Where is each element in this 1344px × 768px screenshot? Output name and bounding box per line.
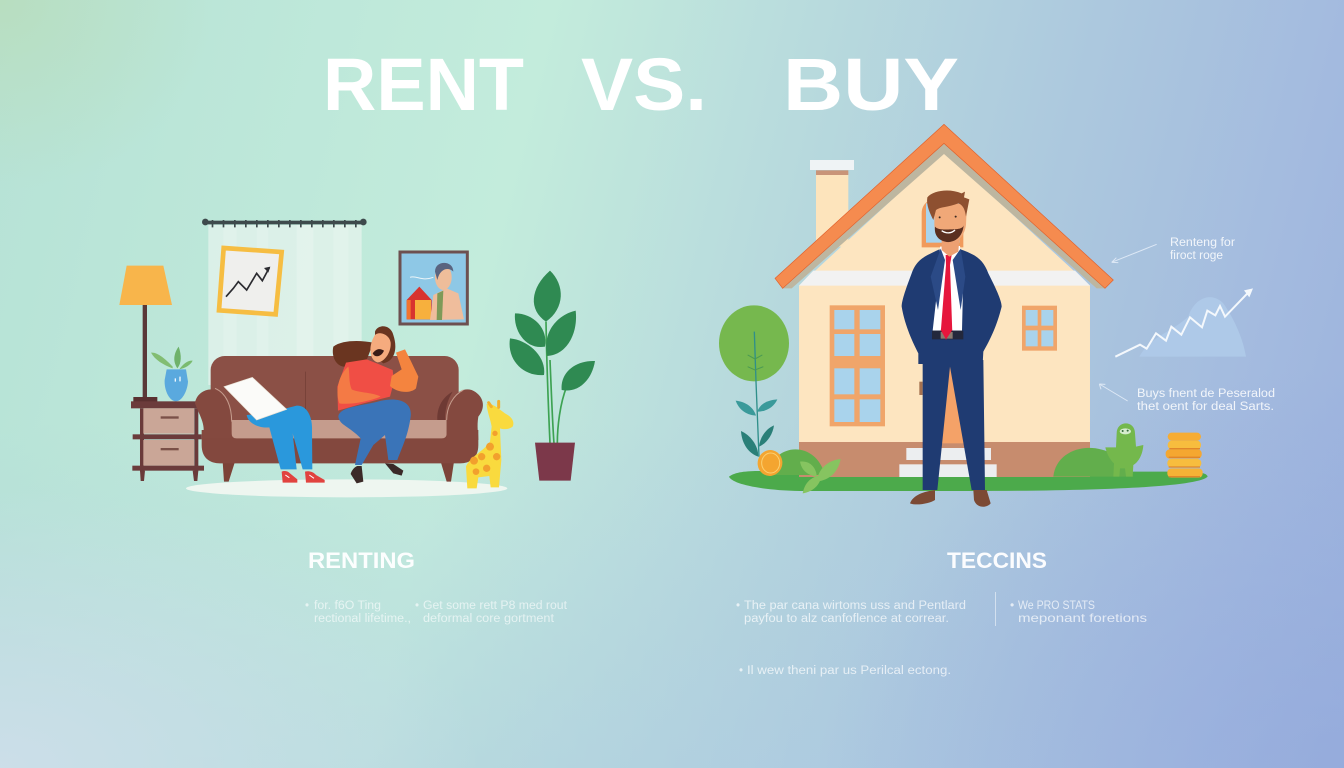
belt bbox=[932, 323, 963, 339]
sofa bbox=[195, 356, 483, 482]
tie bbox=[941, 255, 952, 340]
title: BUY bbox=[783, 43, 959, 126]
text block: buying bullet three: Il wew theni par us Perilcal ectong. bbox=[747, 665, 951, 677]
floor lamp bbox=[119, 266, 172, 402]
curtain rod bbox=[202, 219, 367, 227]
right shrub bbox=[1053, 448, 1133, 477]
heading: renting: RENTING bbox=[308, 548, 415, 573]
text block: renting bullet one: rectional lifetime., bbox=[314, 613, 411, 625]
panel: renting living room illustration bbox=[119, 219, 595, 497]
framed portrait bbox=[400, 252, 467, 324]
title: RENT bbox=[323, 43, 524, 126]
steps bbox=[899, 448, 997, 477]
text block: renting bullet two: Get some rett P8 med rout bbox=[423, 600, 568, 612]
text block: buying bullet two bbox=[1010, 598, 1147, 625]
toy giraffe bbox=[466, 401, 513, 488]
text block: renting bullet one bbox=[305, 600, 411, 625]
text block: renting bullet two: deformal core gortment bbox=[423, 613, 555, 625]
head bbox=[927, 190, 969, 257]
title bbox=[323, 43, 959, 126]
text block: buying bullet two: We PRO STATS bbox=[1018, 598, 1095, 612]
title: VS. bbox=[581, 43, 707, 126]
text block: buying bullet two: meponant foretions bbox=[1018, 611, 1147, 625]
vase plant bbox=[151, 347, 193, 401]
annotation arrow to wall bbox=[1099, 384, 1128, 401]
potted plant bbox=[510, 271, 595, 481]
annotation: renting note bbox=[1170, 237, 1235, 262]
divider bbox=[995, 592, 996, 626]
annotation: renting note: firoct roge bbox=[1170, 250, 1223, 262]
tree bbox=[719, 305, 789, 457]
panel: buying annotations bbox=[1099, 244, 1253, 478]
text block: buying bullet one: • bbox=[736, 600, 740, 612]
chimney bbox=[810, 160, 854, 247]
annotation: renting note: Renteng for bbox=[1170, 237, 1235, 249]
lawn bbox=[729, 471, 1208, 491]
curtain bbox=[208, 225, 362, 385]
shoes bbox=[910, 490, 991, 507]
suit jacket bbox=[902, 249, 1002, 364]
door bbox=[919, 367, 977, 443]
text block: buying bullet one bbox=[736, 600, 966, 625]
text block: renting bullet one: • bbox=[305, 600, 309, 612]
value growth chart bbox=[1115, 288, 1253, 357]
text block: renting bullet two: • bbox=[415, 600, 419, 612]
leaf sprig bbox=[800, 459, 841, 493]
small window bbox=[1022, 306, 1057, 351]
text block: renting bullet one: for. f6O Ting bbox=[314, 600, 381, 612]
gold coin bbox=[755, 447, 785, 479]
annotation: buying note bbox=[1137, 388, 1275, 413]
nightstand bbox=[131, 401, 204, 481]
heading: teccins: TECCINS bbox=[947, 548, 1047, 573]
lapels bbox=[931, 249, 965, 310]
roof bbox=[775, 124, 1113, 288]
businessman bbox=[902, 190, 1002, 507]
rug bbox=[186, 479, 507, 497]
attic window bbox=[922, 198, 963, 247]
panel: buying house illustration bbox=[719, 124, 1208, 507]
annotation arrow to roof bbox=[1112, 244, 1157, 263]
text block: buying bullet one: payfou to alz canfoflence at correar. bbox=[744, 613, 949, 625]
person reading bbox=[224, 377, 325, 483]
text block: buying bullet two: • bbox=[1010, 598, 1014, 612]
annotation: buying note: Buys fnent de Peseralod bbox=[1137, 388, 1275, 400]
text block: buying bullet one: The par cana wirtoms uss and Pentlard bbox=[744, 600, 966, 612]
green mascot bbox=[1105, 423, 1143, 477]
large window bbox=[830, 305, 885, 426]
left shrub bbox=[768, 449, 825, 475]
framed growth chart bbox=[219, 248, 282, 314]
annotation: buying note: thet oent for deal Sarts. bbox=[1137, 401, 1274, 413]
text block: renting bullet two bbox=[415, 600, 568, 625]
coin stack bbox=[1166, 433, 1203, 478]
shirt bbox=[933, 246, 963, 331]
house body bbox=[783, 143, 1105, 477]
trousers bbox=[923, 360, 985, 490]
person laughing bbox=[333, 326, 418, 483]
text block: buying bullet three: • bbox=[739, 665, 743, 677]
